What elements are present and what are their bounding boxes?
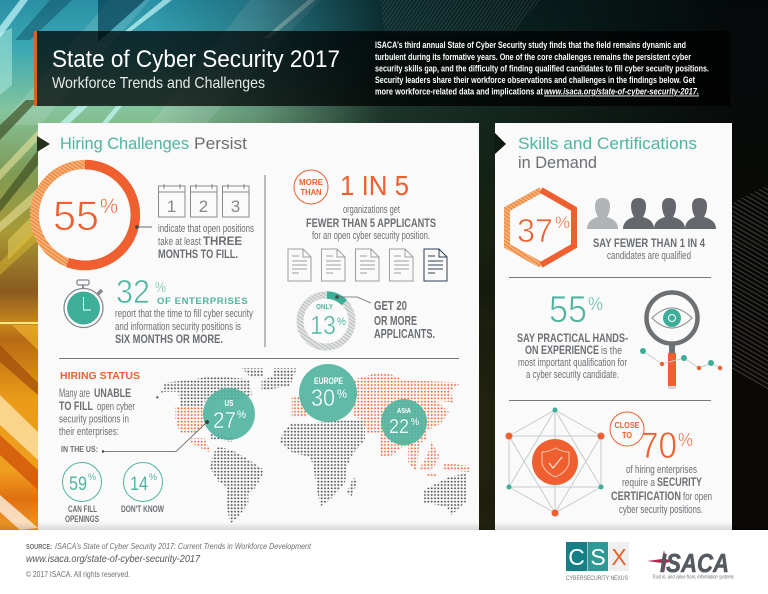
- bubble: europe 30 percent: [299, 364, 357, 422]
- badge: close to: [610, 412, 644, 446]
- stat: 70 percent: %: [678, 430, 693, 450]
- chart: dotted world map: [156, 368, 469, 523]
- text: unable to fill: [59, 386, 135, 438]
- text: say fewer than 1 in 4: SAY FEWER THAN 1 IN 4: [593, 236, 705, 250]
- icon: calendars: 3: [231, 197, 240, 216]
- stat: 32 percent of enterprises: report that the time to fill cyber security: [115, 308, 253, 320]
- intro paragraph: turbulent during its formative years. One of the core challenges remains the persistent cyber: [375, 52, 691, 62]
- logo: csx: C: [568, 544, 585, 570]
- icon: documents: [288, 249, 447, 281]
- bubble: europe 30 percent: EUROPE: [314, 376, 343, 386]
- text: security certification: require a: [622, 477, 656, 489]
- donut: 55 percent: %: [100, 195, 118, 218]
- source line: SOURCE:: [26, 542, 52, 551]
- stat: 59 percent can fill: 59: [69, 474, 87, 495]
- intro paragraph: Security leaders share their workforce observations and challenges in the findings below. Get: [375, 75, 695, 85]
- icon: stopwatch: [64, 280, 103, 328]
- intro paragraph: [375, 40, 709, 96]
- badge: close to: TO: [622, 431, 632, 440]
- text: three months to fill: MONTHS TO FILL.: [158, 247, 238, 261]
- bubble: asia 22 percent: 22: [389, 416, 409, 438]
- text: fewer than 5 applicants: for an open cyber security position.: [312, 230, 430, 242]
- panel: skills and certifications: [495, 123, 732, 530]
- text: security certification: CERTIFICATION: [611, 489, 681, 503]
- text: get 20 or more applicants: [374, 298, 435, 341]
- text: unable to fill: open cyber: [97, 401, 135, 413]
- badge: more than: MORE: [299, 178, 324, 187]
- text: practical hands-on experience: is the: [601, 345, 622, 357]
- stat: 32 percent of enterprises: 32: [116, 273, 150, 310]
- hexagon: 37 percent: %: [555, 213, 570, 232]
- text: security certification: [611, 464, 712, 516]
- text: three months to fill: THREE: [203, 234, 242, 248]
- text: three months to fill: [158, 223, 254, 261]
- icon: calendars: [158, 184, 249, 217]
- bubble: us 27 percent: 27: [213, 407, 236, 433]
- intro paragraph: more workforce-related data and implications at: [375, 86, 543, 96]
- icon: calendars: 2: [199, 197, 208, 216]
- heading: skills and certifications: Skills and Certifications: [518, 134, 697, 153]
- text: security certification: cyber security positions.: [619, 504, 703, 516]
- text: unable to fill: Many are: [59, 386, 90, 400]
- footer: [0, 530, 768, 594]
- subtitle: Workforce Trends and Challenges: [52, 75, 265, 92]
- url: www.isaca.org/state-of-cyber-security-2017: [26, 553, 201, 565]
- bubble: asia 22 percent: %: [411, 417, 419, 428]
- label: in the us: IN THE US:: [61, 445, 98, 454]
- text: three months to fill: indicate that open positions: [158, 223, 254, 235]
- badge: more than: [294, 170, 328, 204]
- bubble: asia 22 percent: ASIA: [397, 406, 411, 415]
- icon: calendars: 1: [167, 197, 176, 216]
- text: unable to fill: their enterprises:: [59, 426, 119, 438]
- title: State of Cyber Security 2017: [52, 46, 340, 73]
- text: security certification: for open: [683, 491, 712, 503]
- text: practical hands-on experience: [517, 331, 628, 381]
- donut: 55 percent: [34, 164, 136, 266]
- text: practical hands-on experience: ON EXPERIENCE: [525, 343, 599, 357]
- text: three months to fill: take at least: [158, 236, 201, 248]
- donut: 13 percent: ONLY: [316, 304, 333, 311]
- logo: isaca: Trust in, and value from, information systems: [652, 574, 734, 580]
- text: unable to fill: TO FILL: [59, 399, 93, 413]
- stat: 14 percent don't know: DON'T KNOW: [121, 504, 164, 514]
- icon: shield network: [506, 408, 604, 516]
- stat: 55 percent: %: [588, 294, 603, 314]
- intro paragraph: www.isaca.org/state-of-cyber-security-2017.: [544, 86, 699, 96]
- heading: skills and certifications: in Demand: [518, 153, 597, 172]
- stat: 14 percent don't know: [121, 462, 164, 514]
- heading: hiring challenges persist: Hiring Challenges: [60, 134, 189, 153]
- text: fewer than 5 applicants: organizations get: [343, 204, 400, 216]
- text: security certification: of hiring enterprises: [626, 464, 697, 476]
- text: get 20 or more applicants: GET 20: [374, 298, 407, 313]
- bubble: us 27 percent: %: [237, 409, 246, 421]
- stat: 1 in 5: 1 IN 5: [340, 170, 409, 201]
- stat: 32 percent of enterprises: OF ENTERPRISES: [157, 296, 248, 307]
- stat: 59 percent can fill: OPENINGS: [65, 514, 99, 524]
- donut: 13 percent: %: [337, 316, 346, 328]
- text: say fewer than 1 in 4: [593, 236, 705, 262]
- logo: csx: S: [590, 544, 606, 570]
- stat: 70 percent: 70: [640, 425, 677, 466]
- heading: hiring challenges persist: Persist: [194, 134, 247, 153]
- header banner: [34, 31, 730, 106]
- text: practical hands-on experience: most important qualification for: [518, 357, 627, 369]
- source line: ISACA’s State of Cyber Security 2017: Current Trends in Workforce Development: [55, 542, 312, 551]
- logo: isaca: ISACA: [660, 548, 729, 578]
- heading: skills and certifications: [518, 134, 697, 172]
- stat: 59 percent can fill: %: [88, 472, 96, 482]
- donut: 55 percent: 55: [53, 192, 99, 239]
- text: unable to fill: UNABLE: [94, 386, 131, 400]
- text: fewer than 5 applicants: FEWER THAN 5 APPLICANTS: [306, 216, 436, 230]
- hexagon: 37 percent: [507, 190, 574, 265]
- stat: 32 percent of enterprises: and information security positions is: [115, 321, 241, 333]
- stat: 14 percent don't know: 14: [130, 474, 148, 495]
- text: practical hands-on experience: SAY PRACTICAL HANDS-: [517, 331, 628, 345]
- bubble: us 27 percent: [203, 388, 255, 440]
- text: say fewer than 1 in 4: candidates are qualified: [607, 250, 691, 262]
- connector: in the us to map: [102, 422, 207, 453]
- text: get 20 or more applicants: OR MORE: [374, 313, 417, 328]
- text: security certification: SECURITY: [657, 475, 702, 489]
- text: fewer than 5 applicants: [306, 204, 436, 242]
- leader line: [135, 225, 152, 229]
- stat: 32 percent of enterprises: [115, 273, 253, 346]
- logo: csx: [566, 542, 629, 582]
- intro paragraph: ISACA’s third annual State of Cyber Security study finds that the field remains dynamic and: [375, 40, 686, 50]
- bubble: europe 30 percent: 30: [311, 385, 335, 412]
- panel: hiring challenges: [34, 123, 479, 530]
- stat: 59 percent can fill: CAN FILL: [68, 504, 97, 514]
- stat: 55 percent: 55: [549, 289, 587, 331]
- badge: more than: THAN: [300, 188, 322, 197]
- stat: 14 percent don't know: %: [149, 472, 157, 482]
- text: practical hands-on experience: a cyber security candidate.: [526, 369, 619, 381]
- donut: 13 percent: [300, 295, 371, 347]
- logo: csx: CYBERSECURITY NEXUS: [566, 576, 628, 582]
- bubble: europe 30 percent: %: [337, 387, 347, 401]
- stat: 32 percent of enterprises: %: [155, 279, 166, 296]
- copyright: © 2017 ISACA. All rights reserved.: [26, 570, 130, 579]
- hexagon: 37 percent: 37: [517, 212, 553, 249]
- logo: csx: X: [611, 544, 627, 570]
- text: unable to fill: security positions in: [59, 414, 129, 426]
- text: get 20 or more applicants: APPLICANTS.: [374, 326, 435, 341]
- bubble: us 27 percent: US: [224, 399, 234, 408]
- icon: four people: [587, 198, 716, 229]
- bubble: asia 22 percent: [381, 399, 427, 445]
- badge: close to: CLOSE: [614, 421, 640, 430]
- stat: 59 percent can fill: [62, 462, 102, 524]
- heading: hiring status: HIRING STATUS: [60, 370, 140, 382]
- stat: 32 percent of enterprises: SIX MONTHS OR MORE.: [115, 332, 223, 346]
- donut: 13 percent: 13: [310, 310, 336, 340]
- icon: magnifier with eye and chart: [640, 292, 722, 389]
